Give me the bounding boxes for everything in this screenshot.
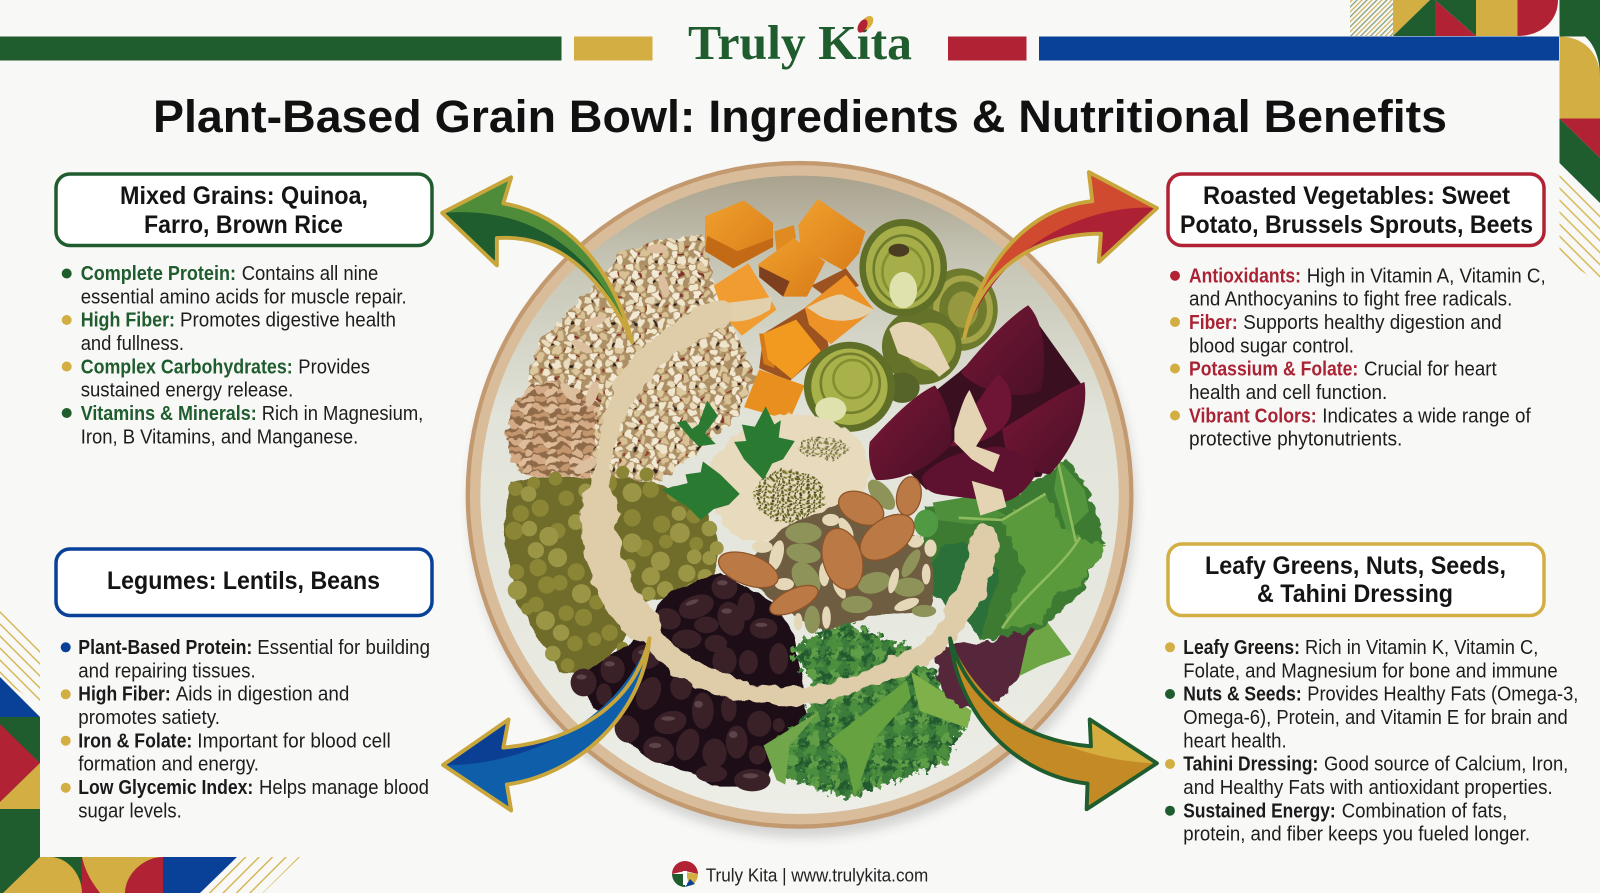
corner decoration: top right bbox=[1350, 0, 1600, 283]
panel: mixed grains benefits bbox=[62, 263, 423, 448]
panel: mixed grains benefits: Promotes digestive health bbox=[180, 310, 396, 332]
panel: mixed grains benefits: Rich in Magnesium, bbox=[262, 403, 423, 425]
food: arugula bbox=[914, 459, 1106, 641]
footer: Truly Kita | www.trulykita.com bbox=[706, 866, 928, 886]
panel: roasted vegetables benefits: Potassium & Folate: bbox=[1189, 359, 1358, 381]
panel: legumes heading bbox=[56, 549, 432, 616]
panel: leafy greens benefits: Nuts & Seeds: bbox=[1183, 684, 1302, 706]
panel: leafy greens benefits: Good source of Calcium, Iron, bbox=[1324, 754, 1568, 776]
panel: roasted vegetables benefits: blood sugar control. bbox=[1189, 335, 1354, 357]
panel: leafy greens benefits: Leafy Greens: bbox=[1183, 637, 1300, 659]
panel: legumes benefits: High Fiber: bbox=[78, 684, 171, 706]
panel: leafy greens benefits: Tahini Dressing: bbox=[1183, 754, 1318, 776]
arrow: to legumes bbox=[443, 638, 650, 810]
panel: legumes benefits: formation and energy. bbox=[78, 754, 259, 776]
food: sweet potato cubes bbox=[705, 199, 874, 420]
footer logo icon bbox=[672, 861, 698, 887]
food: grains bbox=[506, 234, 755, 483]
panel: mixed grains benefits: essential amino acids for muscle repair. bbox=[81, 286, 407, 308]
panel: legumes benefits: Iron & Folate: bbox=[78, 730, 192, 752]
panel: leafy greens benefits: Omega-6), Protein, and Vitamin E for brain and bbox=[1183, 707, 1568, 729]
grain bowl illustration bbox=[442, 161, 1157, 838]
title: Plant-Based Grain Bowl: Ingredients & Nutritional Benefits bbox=[153, 91, 1447, 142]
panel: mixed grains benefits: Provides bbox=[298, 356, 370, 378]
panel: legumes benefits: and repairing tissues. bbox=[78, 660, 256, 682]
panel: mixed grains benefits: Complete Protein: bbox=[81, 263, 236, 285]
corner decoration: bottom left bbox=[0, 605, 300, 893]
panel: roasted vegetables benefits: health and cell function. bbox=[1189, 382, 1387, 404]
panel: roasted vegetables benefits: High in Vitamin A, Vitamin C, bbox=[1307, 265, 1546, 287]
panel: roasted vegetables benefits: Vibrant Colors: bbox=[1189, 405, 1317, 427]
panel: mixed grains heading: Mixed Grains: Quinoa, bbox=[120, 182, 368, 210]
panel: roasted vegetables benefits: Antioxidants: bbox=[1189, 265, 1301, 287]
panel: legumes benefits: Helps manage blood bbox=[259, 777, 429, 799]
panel: legumes benefits: Important for blood cell bbox=[197, 730, 391, 752]
panel: mixed grains benefits: Contains all nine bbox=[242, 263, 378, 285]
panel: leafy greens benefits: Sustained Energy: bbox=[1183, 800, 1336, 822]
panel: leafy greens benefits: and Healthy Fats with antioxidant properties. bbox=[1183, 777, 1553, 799]
panel: roasted vegetables heading bbox=[1168, 174, 1544, 246]
panel: mixed grains benefits: Vitamins & Minerals: bbox=[81, 403, 257, 425]
panel: legumes benefits bbox=[61, 637, 430, 822]
panel: legumes benefits: sugar levels. bbox=[78, 800, 182, 822]
panel: legumes benefits: Essential for building bbox=[257, 637, 430, 659]
food: parsley bbox=[662, 401, 795, 520]
food: nuts and seeds bbox=[714, 475, 937, 634]
panel: legumes benefits: Aids in digestion and bbox=[176, 684, 349, 706]
panel: leafy greens benefits: Combination of fats, bbox=[1342, 800, 1507, 822]
panel: leafy greens benefits: Rich in Vitamin K, Vitamin C, bbox=[1305, 637, 1538, 659]
food: black beans bbox=[571, 572, 807, 791]
panel: roasted vegetables heading: Roasted Vegetables: Sweet bbox=[1203, 182, 1511, 210]
panel: legumes heading: Legumes: Lentils, Beans bbox=[107, 567, 380, 595]
panel: mixed grains benefits: High Fiber: bbox=[81, 310, 175, 332]
food: lentils bbox=[503, 466, 724, 672]
arrow: to mixed grains bbox=[442, 177, 632, 342]
panel: roasted vegetables benefits bbox=[1170, 265, 1546, 451]
food: tahini dressing bbox=[599, 312, 985, 697]
panel: leafy greens benefits: Provides Healthy Fats (Omega-3, bbox=[1307, 684, 1578, 706]
panel: mixed grains heading bbox=[56, 174, 432, 246]
panel: leafy greens heading: & Tahini Dressing bbox=[1257, 580, 1453, 608]
panel: roasted vegetables benefits: Fiber: bbox=[1189, 312, 1238, 334]
panel: roasted vegetables benefits: and Anthocyanins to fight free radicals. bbox=[1189, 289, 1512, 311]
arrow: to leafy greens bbox=[950, 638, 1157, 809]
panel: mixed grains benefits: sustained energy release. bbox=[81, 380, 293, 402]
panel: leafy greens benefits bbox=[1165, 637, 1578, 846]
panel: leafy greens heading bbox=[1168, 544, 1544, 616]
food: kale and radicchio bbox=[764, 620, 1071, 797]
panel: mixed grains benefits: and fullness. bbox=[81, 333, 184, 355]
bowl bbox=[466, 161, 1136, 838]
panel: leafy greens benefits: heart health. bbox=[1183, 730, 1287, 752]
footer bbox=[672, 861, 928, 887]
arrow: to roasted vegetables bbox=[964, 172, 1157, 337]
panel: roasted vegetables benefits: protective phytonutrients. bbox=[1189, 429, 1402, 451]
panel: leafy greens heading: Leafy Greens, Nuts, Seeds, bbox=[1205, 552, 1506, 580]
panel: legumes benefits: promotes satiety. bbox=[78, 707, 220, 729]
panel: leafy greens benefits: Folate, and Magnesium for bone and immune bbox=[1183, 660, 1558, 682]
panel: roasted vegetables benefits: Indicates a wide range of bbox=[1322, 405, 1531, 427]
panel: legumes benefits: Plant-Based Protein: bbox=[78, 637, 252, 659]
panel: leafy greens benefits: protein, and fiber keeps you fueled longer. bbox=[1183, 824, 1530, 846]
panel: roasted vegetables benefits: Crucial for heart bbox=[1364, 359, 1497, 381]
panel: roasted vegetables benefits: Supports healthy digestion and bbox=[1243, 312, 1502, 334]
logo: Truly Kita bbox=[688, 15, 912, 70]
panel: roasted vegetables heading: Potato, Brussels Sprouts, Beets bbox=[1180, 211, 1533, 239]
panel: mixed grains heading: Farro, Brown Rice bbox=[144, 211, 343, 239]
food: brussels sprouts bbox=[804, 219, 998, 432]
header bars bbox=[0, 36, 1559, 60]
panel: legumes benefits: Low Glycemic Index: bbox=[78, 777, 253, 799]
panel: mixed grains benefits: Complex Carbohydrates: bbox=[81, 356, 293, 378]
food: beets bbox=[869, 305, 1085, 516]
panel: mixed grains benefits: Iron, B Vitamins, and Manganese. bbox=[81, 426, 358, 448]
